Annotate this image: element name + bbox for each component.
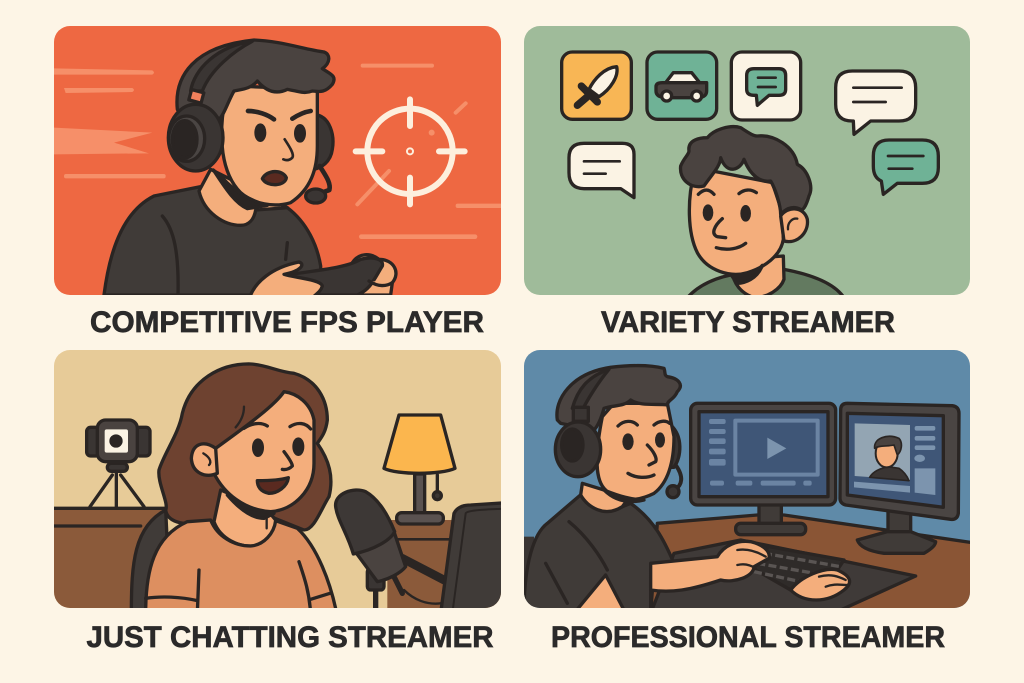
shirt <box>524 493 674 613</box>
forearm and hand <box>651 541 769 591</box>
nose <box>282 452 292 470</box>
icon: sword tile <box>562 52 631 119</box>
brows <box>698 190 756 194</box>
shirt <box>687 269 844 298</box>
second hand <box>791 569 850 600</box>
shirt <box>146 520 337 613</box>
hair <box>159 364 331 530</box>
label: competitive FPS player: COMPETITIVE FPS PLAYER <box>90 306 484 339</box>
controller <box>281 258 383 295</box>
hair <box>557 366 680 430</box>
eyes <box>704 206 712 219</box>
monitor: webcam view <box>840 403 959 553</box>
label: just chatting streamer: JUST CHATTING STREAMER <box>86 621 494 654</box>
ear cup <box>168 104 223 171</box>
ear <box>781 209 807 242</box>
chair <box>131 510 171 613</box>
desk right <box>387 520 507 613</box>
mouth <box>262 172 286 185</box>
nose and smile <box>714 219 746 249</box>
hair <box>177 40 334 121</box>
jaw shadow <box>213 170 267 209</box>
brows <box>244 423 311 429</box>
character: variety streamer <box>681 127 844 298</box>
icon: crosshair <box>356 99 465 204</box>
chat bubble: left <box>569 143 634 198</box>
far ear cup <box>671 425 680 467</box>
face <box>222 86 317 205</box>
label: professional streamer: PROFESSIONAL STREAMER <box>551 621 945 654</box>
neck <box>214 490 276 546</box>
nose and smile <box>628 445 656 477</box>
upper arm <box>574 575 626 613</box>
nose <box>283 139 293 160</box>
chin shadow <box>227 495 274 518</box>
character: professional streamer <box>524 366 850 613</box>
ear cup <box>555 422 601 477</box>
brows <box>618 421 670 426</box>
desk <box>651 515 977 613</box>
desk left <box>54 506 165 608</box>
eyes <box>256 125 265 140</box>
chat bubble: green <box>873 140 938 194</box>
neck <box>581 483 627 511</box>
icon: webcam on tripod <box>87 420 150 507</box>
right hand <box>352 255 396 295</box>
headband <box>191 41 252 91</box>
character: chatting woman <box>146 364 337 613</box>
chair <box>521 537 534 613</box>
monitor <box>441 503 507 613</box>
neck <box>199 169 287 225</box>
eyes <box>254 440 262 455</box>
far ear cup <box>314 114 333 169</box>
face <box>597 403 674 500</box>
eyes <box>624 435 632 448</box>
character: FPS gamer <box>104 40 396 303</box>
lamp <box>384 415 455 524</box>
mouth <box>257 478 288 493</box>
hair <box>681 127 811 214</box>
panel: just chatting streamer <box>47 350 507 615</box>
neck <box>734 256 784 298</box>
speed streaks <box>54 64 502 239</box>
label: variety streamer: VARIETY STREAMER <box>601 306 895 339</box>
brows <box>248 111 311 119</box>
mouse pad and keyboard <box>651 540 916 613</box>
panel: competitive FPS player <box>54 26 502 303</box>
face <box>689 169 783 274</box>
microphone on arm <box>336 490 444 613</box>
chin shadow <box>604 490 644 502</box>
left hand <box>250 260 324 295</box>
panel: variety streamer <box>524 26 970 298</box>
microphone <box>675 465 681 490</box>
icon: chat tile <box>731 52 801 120</box>
icon: car tile <box>647 52 717 119</box>
monitor: editor <box>691 403 836 535</box>
chat bubble: top right <box>836 71 916 134</box>
ear <box>191 444 217 475</box>
panel: professional streamer <box>521 350 977 613</box>
face <box>214 392 314 512</box>
shirt <box>104 187 321 295</box>
headband <box>572 369 609 410</box>
microphone <box>317 166 330 194</box>
chin shadow <box>732 265 762 283</box>
